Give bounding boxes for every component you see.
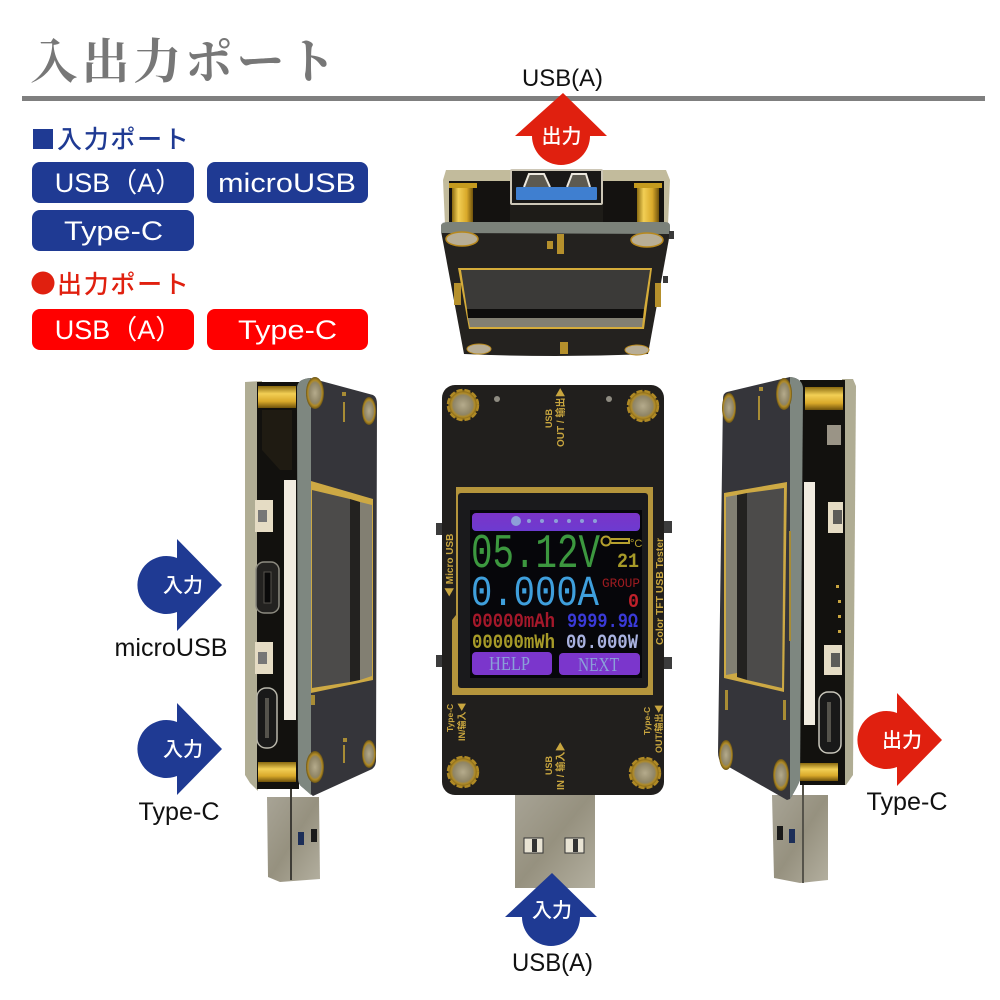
gold window frame (724, 482, 787, 692)
energy reading: 00000mWh (472, 632, 555, 655)
tactile switch lower (255, 642, 273, 674)
label: Type-C input: Type-C (138, 798, 220, 826)
side buttons (436, 521, 672, 669)
badge: Type-C input (32, 210, 194, 251)
gold window frame (458, 268, 652, 329)
back board edge (838, 379, 856, 785)
tactile switch upper (255, 500, 273, 532)
badge: Type-C output: Type-C (238, 315, 337, 345)
title: 入出力ポート (30, 23, 340, 92)
gold standoff top (258, 386, 296, 408)
title rule (22, 96, 985, 101)
current reading: 0.000A (471, 569, 599, 618)
label: microUSB input: microUSB (114, 634, 228, 662)
silkscreen labels: OUT / 输出▶ (554, 388, 567, 447)
badge: microUSB input (207, 162, 368, 203)
flat display (312, 490, 372, 688)
silkscreen marks (454, 234, 661, 354)
label: Micro USB: ◀ Micro USB (444, 534, 456, 597)
arrow: USB(A) input: 入力 (532, 899, 572, 922)
screws (306, 377, 376, 783)
tactile switch upper (828, 502, 843, 533)
USB plug (772, 785, 828, 883)
silkscreen labels: IN/输入◀ (456, 702, 467, 741)
arrow: Type-C output (857, 693, 942, 786)
plate edge (297, 378, 311, 795)
screws (446, 232, 663, 355)
arrow: USB(A) output (515, 93, 607, 165)
arrow: USB(A) input (505, 873, 597, 946)
arrow: Type-C input (137, 703, 222, 795)
device: left view (245, 377, 377, 882)
display bezel (458, 493, 648, 688)
heading: input ports: 入力ポート (57, 126, 191, 154)
arrow: Type-C input: 入力 (163, 738, 203, 761)
badge: microUSB input: microUSB (218, 168, 356, 198)
silkscreen marks (725, 387, 791, 720)
badge: USB(A) output (32, 309, 194, 350)
badge: Type-C output (207, 309, 368, 350)
micro USB port (256, 562, 279, 613)
white flex strip (284, 480, 296, 720)
tactile switch lower (824, 645, 842, 675)
label: Type-C output: Type-C (866, 788, 948, 816)
next button (559, 653, 640, 676)
flat display (726, 488, 784, 688)
group value: 0 (628, 591, 639, 613)
gold window frame (311, 481, 373, 693)
silkscreen marks (311, 392, 347, 763)
silkscreen labels: OUT/输出◀ (653, 704, 664, 753)
label: USB(A) input: USB(A) (512, 949, 593, 977)
panel: input ports legend (32, 126, 368, 251)
arrow: Type-C output: 出力 (882, 729, 922, 752)
USB-A socket (510, 169, 603, 223)
badge: Type-C input: Type-C (64, 216, 163, 246)
side switches (663, 231, 674, 283)
capacity reading: 00000mAh (472, 611, 555, 634)
badge: USB(A) input: USB（A） (55, 168, 182, 198)
connector pins (836, 585, 841, 633)
arrow: USB(A) output: 出力 (542, 125, 582, 148)
Type-C port (257, 688, 277, 748)
gold standoff top (805, 387, 843, 410)
circuit board (257, 382, 299, 789)
flat display (461, 270, 650, 327)
label: USB IN: USB (544, 755, 554, 775)
back plate (443, 170, 670, 225)
label: Color TFT USB Tester: Color TFT USB Tester (654, 538, 666, 645)
next button: NEXT (578, 654, 619, 676)
front plate (297, 378, 377, 796)
status bar (472, 513, 640, 531)
heading: output ports: 出力ポート (57, 271, 191, 299)
group label: GROUP (602, 576, 640, 591)
device: right view (718, 377, 856, 883)
gold display frame (452, 487, 653, 695)
arrow: microUSB input (137, 539, 222, 631)
Type-C port (819, 692, 841, 753)
silkscreen labels: IN / 输入▶ (554, 742, 567, 790)
plate edge (441, 222, 670, 234)
gold standoff bottom (258, 762, 296, 782)
label: USB(A) output: USB(A) (522, 65, 603, 92)
help button (472, 652, 552, 675)
device: top view (441, 169, 674, 356)
screws (448, 390, 660, 788)
temperature unit: °C (630, 538, 642, 550)
label: Type-C IN: Type-C (445, 704, 455, 732)
small slide switch (827, 425, 841, 445)
temperature value: 21 (617, 551, 639, 574)
device: front view (436, 385, 672, 888)
white flex strip (804, 482, 815, 725)
help button: HELP (489, 653, 530, 675)
arrow: microUSB input: 入力 (163, 574, 203, 597)
badge: USB(A) input (32, 162, 194, 203)
display screen (470, 510, 642, 678)
badge: USB(A) output: USB（A） (55, 315, 182, 345)
plate edge (790, 377, 803, 799)
USB plug (267, 785, 320, 882)
gold standoff bottom (800, 763, 838, 781)
voltage reading: 05.12V (471, 528, 600, 582)
front plate (718, 377, 803, 800)
mounting holes (494, 396, 612, 402)
resistance reading: 9999.9Ω (567, 611, 638, 634)
label: USB OUT: USB (544, 408, 554, 428)
silkscreen labels (444, 388, 666, 790)
screws (719, 378, 792, 791)
front plate (441, 231, 670, 356)
back board edge (245, 381, 262, 791)
power reading: 00.000W (566, 632, 638, 655)
circuit board (442, 385, 664, 795)
label: Type-C OUT: Type-C (642, 707, 652, 735)
gold standoffs (449, 183, 662, 223)
circuit board (800, 380, 845, 785)
panel: output ports legend (32, 271, 368, 350)
thermometer icon (602, 536, 629, 546)
USB plug (515, 790, 595, 888)
